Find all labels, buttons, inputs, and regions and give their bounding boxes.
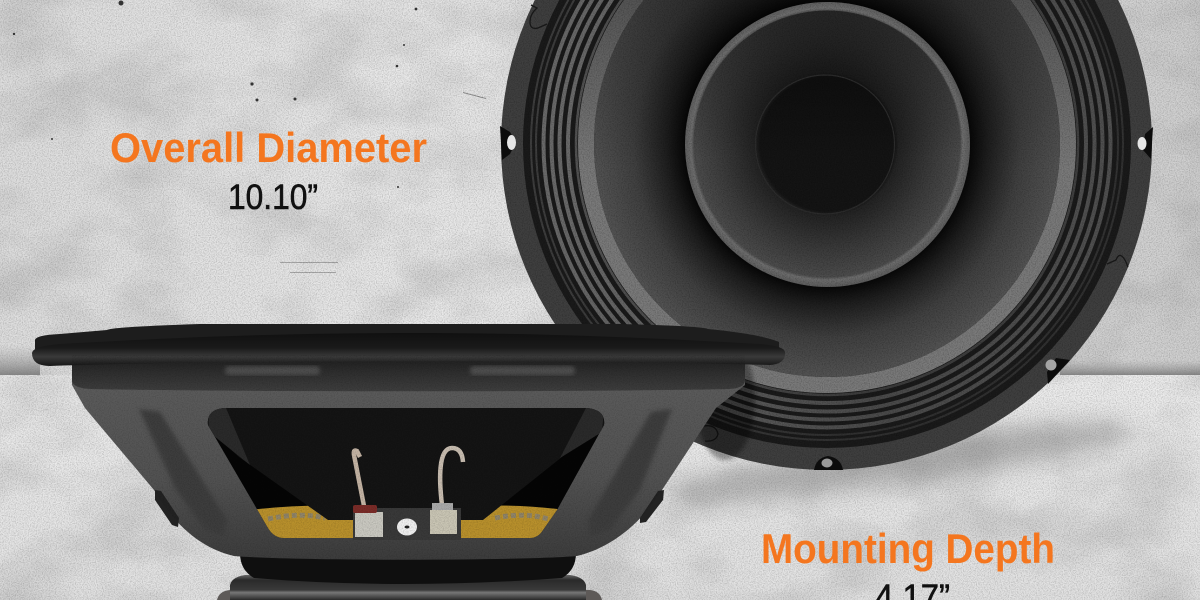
value: overall diameter: 10.10” <box>228 178 318 217</box>
terminal left cap <box>353 505 377 513</box>
side mount right <box>640 490 664 523</box>
wall speckles <box>13 0 486 273</box>
white reflection right <box>493 486 517 504</box>
paper cone <box>594 0 1060 377</box>
upper cone and surround shade <box>578 0 1076 393</box>
mounting notch bottom <box>814 456 843 470</box>
terminal centre hole <box>397 518 417 536</box>
front frame <box>501 0 1152 470</box>
dust dome <box>685 2 970 287</box>
basket body <box>72 355 745 560</box>
cone fold left <box>208 408 250 465</box>
dome centre ring <box>756 75 894 214</box>
terminal centre dot <box>404 526 410 528</box>
background: concrete wall <box>0 0 1200 376</box>
terminal block <box>353 508 461 540</box>
shadow from side speaker <box>695 340 755 460</box>
yellow spider <box>257 506 558 538</box>
surround ribs <box>531 0 1123 440</box>
lead wire left <box>354 450 364 506</box>
speaker: front view <box>500 0 1153 471</box>
magnet neck <box>240 553 576 584</box>
magnet plate <box>230 575 586 600</box>
speaker surface grain <box>500 0 1153 471</box>
terminal left pad <box>355 512 383 537</box>
mounting notch left <box>500 126 516 160</box>
lead wire right <box>440 448 463 505</box>
frame inner edge <box>523 0 1131 448</box>
basket window <box>208 408 604 538</box>
window contents <box>200 405 612 540</box>
floor shadow of front speaker <box>665 409 1135 515</box>
speaker: side view <box>32 322 786 600</box>
terminal right pad <box>430 510 457 534</box>
mounting hole left <box>507 135 516 150</box>
heading: overall diameter: Overall Diameter <box>110 124 427 171</box>
rim lower ledge <box>72 355 745 391</box>
wall base shadow right <box>1060 360 1200 375</box>
magnet small flange <box>217 590 602 600</box>
rim flange <box>32 333 785 366</box>
side mount left <box>155 490 179 527</box>
mounting hole bottom right <box>1046 360 1056 370</box>
heading: mounting depth: Mounting Depth <box>761 525 1055 572</box>
mounting hole bottom <box>822 458 832 468</box>
basket rib left <box>139 409 227 537</box>
spider ridges <box>268 515 548 519</box>
inner cone <box>200 405 612 520</box>
mounting notch right <box>1143 127 1153 159</box>
terminal right cap <box>432 503 453 510</box>
ledge highlights <box>225 366 575 375</box>
mounting notch bottom right <box>1047 358 1070 384</box>
white reflection left <box>306 504 308 506</box>
mounting hole right <box>1138 137 1146 150</box>
dome upper shade <box>694 10 962 278</box>
cone fold right <box>560 408 604 458</box>
basket rib right <box>588 409 672 537</box>
wall base shadow left <box>0 345 40 375</box>
background: floor <box>0 375 1200 600</box>
gasket joints <box>530 5 1128 441</box>
surround edge ring <box>586 0 1068 385</box>
gasket top <box>35 324 779 350</box>
speaker body grain <box>72 356 744 559</box>
